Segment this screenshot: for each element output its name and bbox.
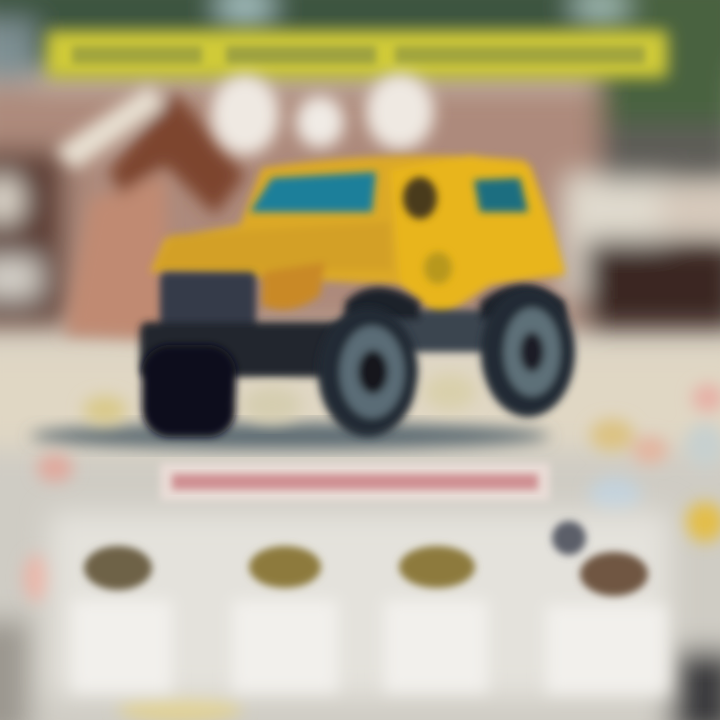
ground <box>0 348 720 720</box>
icon: vehicle 1 <box>84 546 152 590</box>
icon: vehicle 4 <box>580 552 648 596</box>
card 3 <box>384 546 488 692</box>
title banner <box>46 30 668 78</box>
icon: vehicle 3 <box>399 546 475 588</box>
icon: vehicle 2 <box>249 546 321 588</box>
wheels <box>142 287 575 437</box>
subtitle banner <box>160 463 550 501</box>
windows <box>250 172 528 284</box>
house <box>55 85 245 340</box>
vehicle body <box>150 155 565 318</box>
card 2 <box>232 546 338 692</box>
scattered decorative dots <box>24 384 720 720</box>
card 4 <box>546 521 666 693</box>
card 1 <box>72 546 172 692</box>
icon: round badge <box>552 521 586 555</box>
white clouds <box>211 74 434 155</box>
panel: four feature cards <box>50 512 670 698</box>
chassis <box>140 272 565 377</box>
yellow vehicle <box>30 155 575 449</box>
ground patch under vehicle <box>242 387 302 423</box>
vehicle shadow <box>30 423 550 449</box>
